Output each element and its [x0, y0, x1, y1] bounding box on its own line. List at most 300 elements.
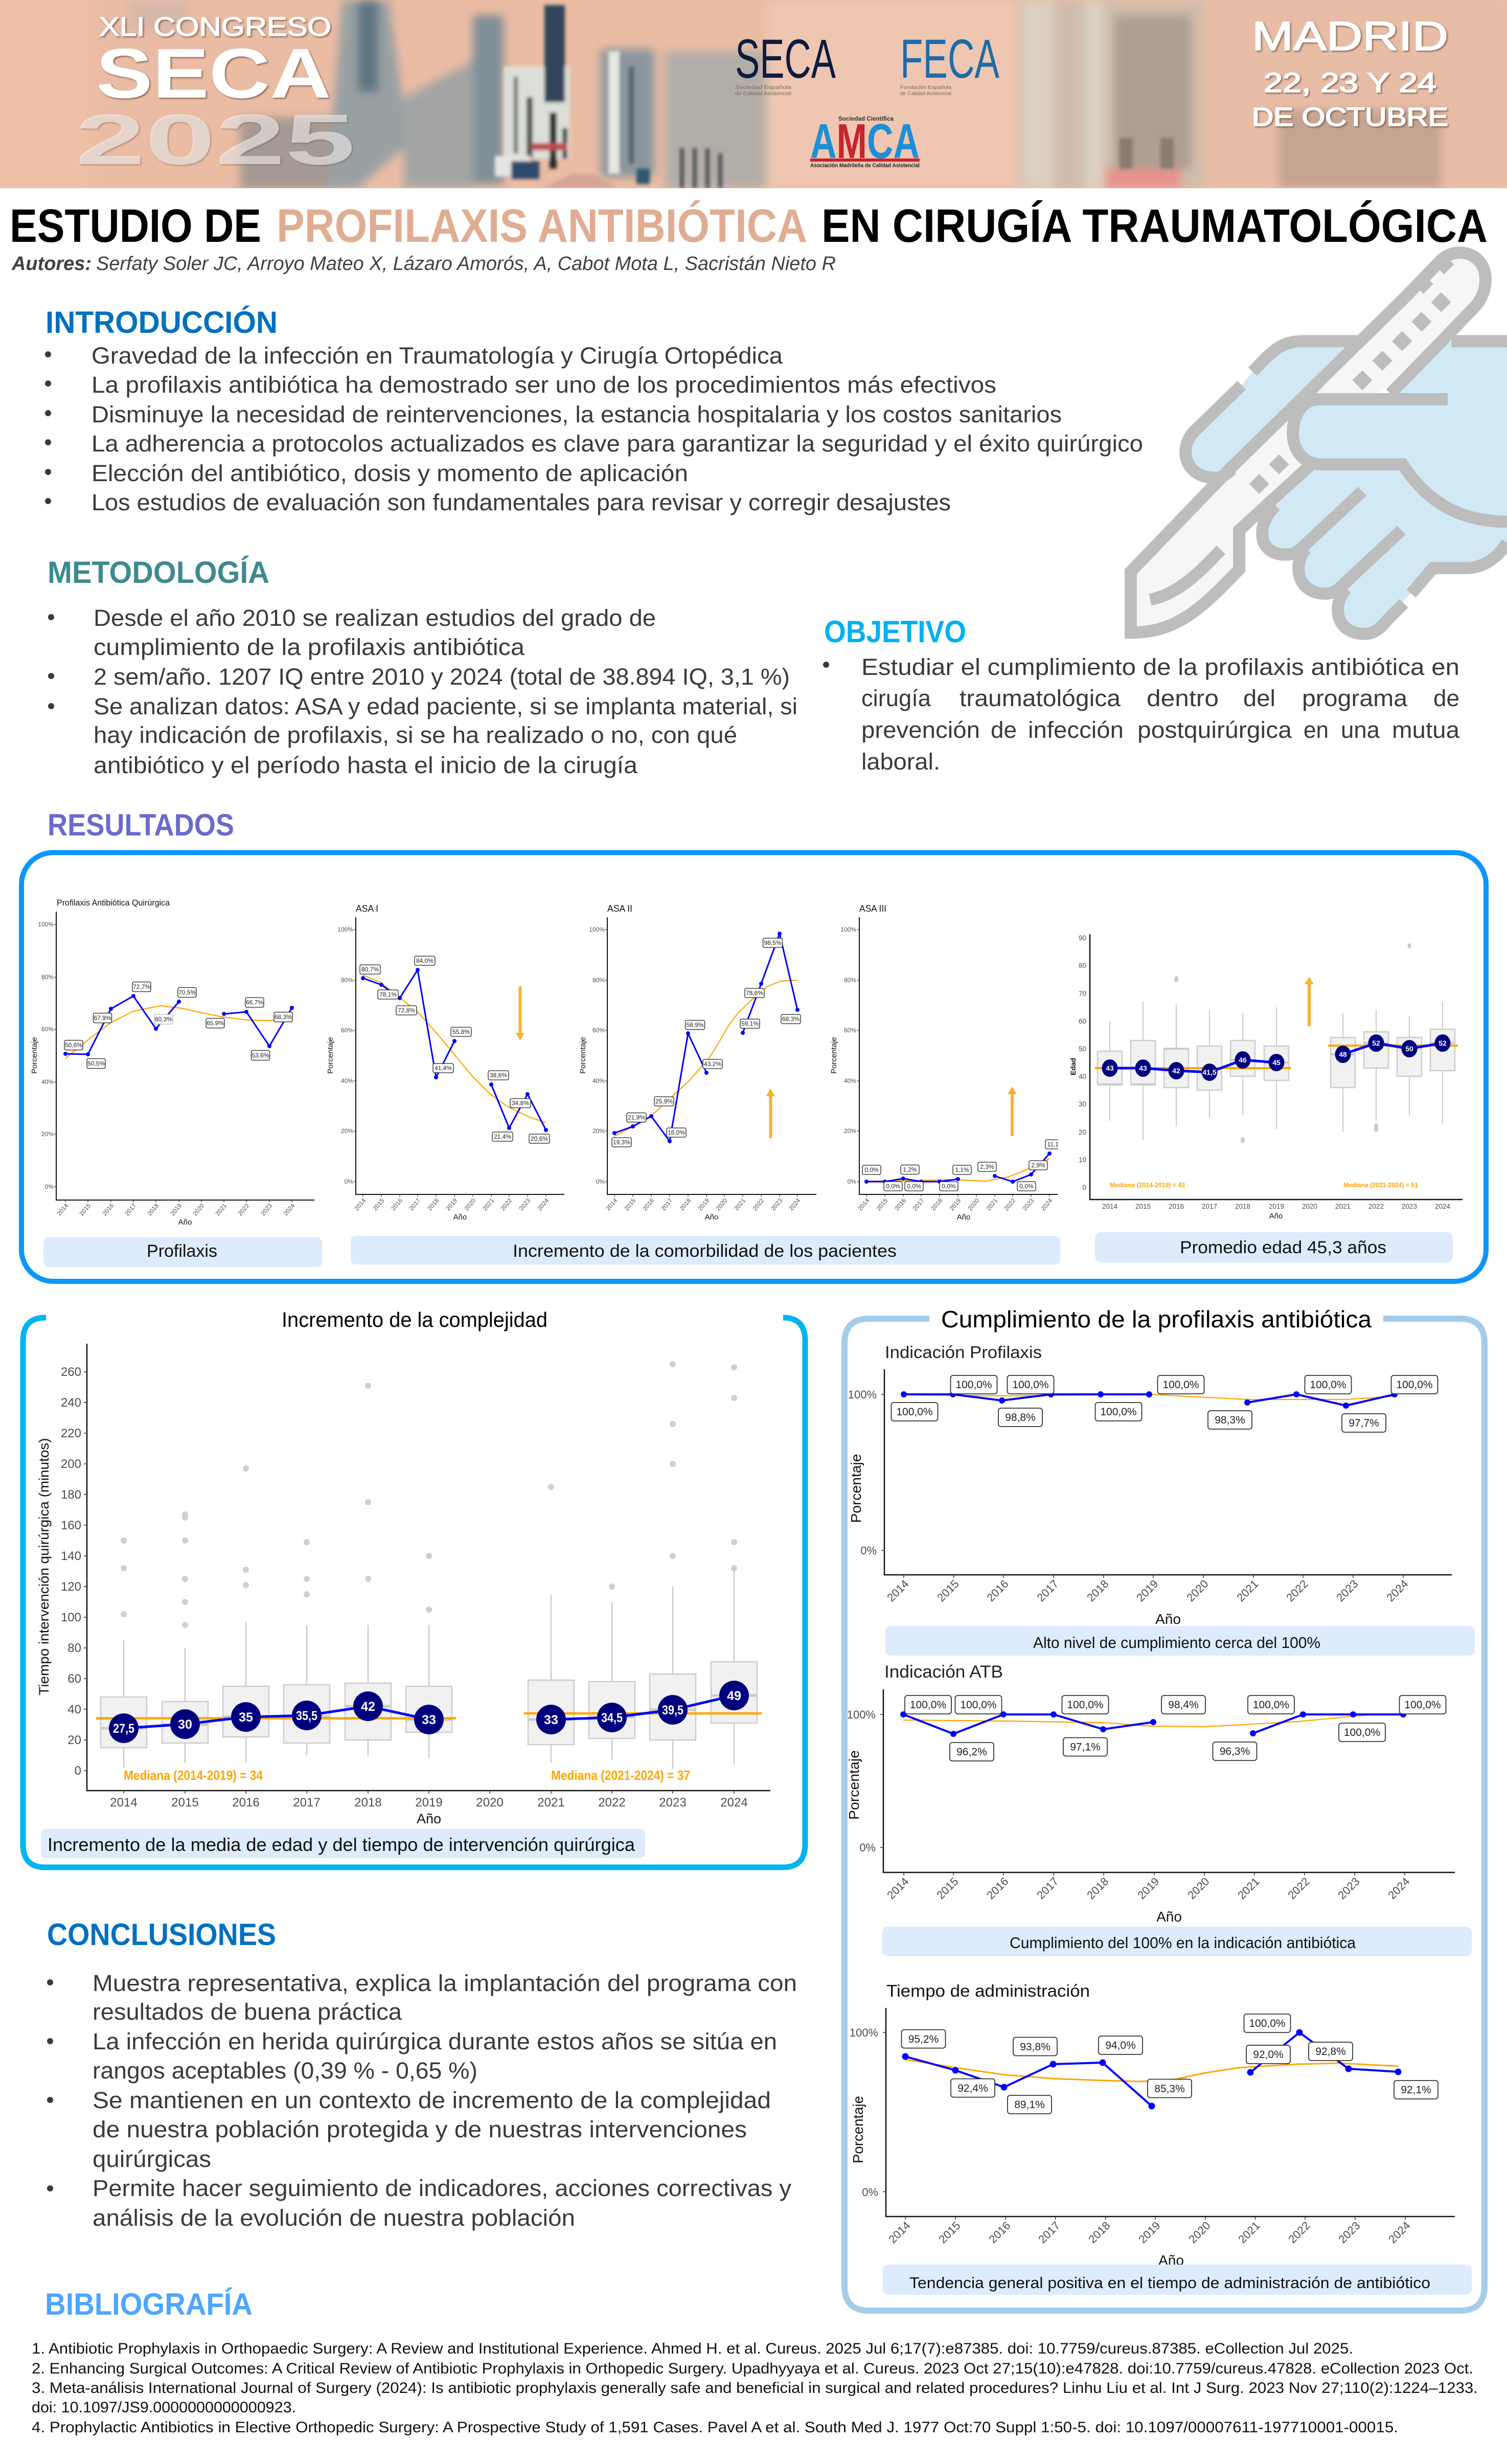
- chart: ASA II: 2022: [751, 1197, 766, 1212]
- chart: tiempo de administración: 2023: [1336, 2219, 1363, 2246]
- chart: indicación ATB: 96,2%: [956, 1746, 987, 1758]
- chart: indicación profilaxis: [848, 1343, 1452, 1627]
- chart: ASA III: 2015: [875, 1197, 889, 1212]
- chart: ASA III: 2,3%: [980, 1163, 994, 1170]
- text block: conclusions bullets: La infección en herida quirúrgica durante estos años se sitúa en: [93, 2028, 777, 2054]
- heading: bibliografía: BIBLIOGRAFÍA: [45, 2287, 253, 2321]
- chart: tiempo de administración: 2016: [986, 2219, 1013, 2246]
- chart: tiempo de administración: 89,1%: [1014, 2099, 1045, 2111]
- chart: indicación ATB: 2017: [1034, 1875, 1061, 1902]
- chart: profilaxis: 2023: [259, 1202, 274, 1217]
- chart: indicación ATB: 2014: [884, 1875, 911, 1902]
- logo: SECA: Sociedad Española: [735, 85, 792, 91]
- chart: profilaxis: 67,9%: [94, 1014, 111, 1022]
- chart: surgical time boxplot: 39,5: [662, 1703, 683, 1717]
- chart: profilaxis: Año: [178, 1218, 192, 1227]
- chart: age boxplot: 2023: [1402, 1203, 1417, 1210]
- chart: ASA II: 2020: [714, 1197, 729, 1212]
- chart: surgical time boxplot: 220: [61, 1427, 81, 1440]
- chart: ASA I: 80,7%: [361, 966, 379, 973]
- chart: surgical time boxplot: 34,5: [601, 1711, 623, 1725]
- logo: AMCA: Sociedad Científica: [838, 115, 894, 122]
- logo: FECA: [900, 39, 999, 95]
- caption: profilaxis: Profilaxis: [147, 1241, 217, 1261]
- chart: indicación ATB: 97,1%: [1070, 1742, 1101, 1753]
- chart: indicación ATB: 0%: [859, 1841, 876, 1854]
- text block: conclusions bullets: de nuestra población protegida y de nuestras intervenciones: [93, 2116, 747, 2142]
- chart: indicación ATB: [846, 1662, 1455, 1925]
- chart: ASA II: 68,3%: [782, 1015, 800, 1023]
- title: PROFILAXIS ANTIBIÓTICA: [277, 199, 807, 252]
- heading: objetivo: OBJETIVO: [824, 615, 966, 649]
- text block: methodology bullets: 2 sem/año. 1207 IQ entre 2010 y 2024 (total de 38.894 IQ, 3,1 %): [94, 664, 790, 690]
- chart: tiempo de administración: 2014: [886, 2219, 913, 2246]
- caption: comorbilidad: Incremento de la comorbilidad de los pacientes: [513, 1241, 897, 1261]
- text block: methodology bullets: antibiótico y el período hasta el inicio de la cirugía: [94, 752, 638, 778]
- chart: ASA II: Porcentaje: [579, 1037, 587, 1074]
- caption: cumplimiento del 100%: Cumplimiento del 100% en la indicación antibiótica: [1010, 1934, 1356, 1952]
- chart: age boxplot: 41,5: [1202, 1068, 1217, 1076]
- text block: conclusions bullets: análisis de la evolución de nuestra población: [93, 2205, 575, 2231]
- chart: ASA III: 0,0%: [942, 1183, 956, 1190]
- logo: SECA: SECA: [735, 28, 836, 89]
- chart: profilaxis: 2021: [214, 1202, 229, 1217]
- chart: ASA III: 0,0%: [1019, 1183, 1034, 1190]
- chart: ASA III: 80%: [844, 977, 856, 984]
- chart: ASA II: 80%: [592, 977, 605, 984]
- chart: indicación ATB: Porcentaje: [846, 1750, 862, 1820]
- chart: tiempo de administración: 93,8%: [1020, 2041, 1051, 2053]
- chart: ASA I: 72,8%: [398, 1007, 415, 1014]
- chart: indicación profilaxis: 97,7%: [1349, 1417, 1379, 1429]
- chart: tiempo de administración: Tiempo de administración: [886, 1981, 1090, 2000]
- chart: ASA III: 2016: [893, 1197, 908, 1212]
- heading: resultados: RESULTADOS: [48, 808, 234, 842]
- chart: indicación profilaxis: 2022: [1284, 1577, 1311, 1604]
- chart: profilaxis: 65,9%: [207, 1020, 224, 1027]
- chart: profilaxis: 20%: [41, 1131, 54, 1138]
- text block: methodology bullets: [48, 605, 797, 778]
- chart: tiempo de administración: 92,4%: [957, 2083, 988, 2094]
- arrow: age up: [1305, 977, 1314, 1026]
- chart: surgical time boxplot: 35,5: [296, 1709, 317, 1723]
- chart: indicación ATB: Año: [1156, 1909, 1182, 1925]
- chart: tiempo de administración: 2017: [1036, 2219, 1063, 2246]
- chart: ASA II: 2015: [623, 1197, 637, 1212]
- chart: indicación ATB: 98,4%: [1168, 1699, 1199, 1711]
- chart: profilaxis: 70,5%: [178, 989, 196, 996]
- chart: surgical time boxplot: Mediana (2021-2024) = 37: [551, 1768, 690, 1783]
- chart: ASA I: 34,8%: [512, 1099, 529, 1106]
- chart: indicación profilaxis: 2023: [1334, 1577, 1361, 1604]
- text block: objective: programa: [1302, 685, 1408, 711]
- chart: ASA I: Año: [453, 1213, 467, 1222]
- chart: surgical time boxplot: 27,5: [113, 1722, 134, 1736]
- chart: ASA I: 2018: [426, 1197, 441, 1212]
- chart: tiempo de administración: 2019: [1136, 2219, 1163, 2246]
- arrow: ASA II up: [766, 1089, 775, 1138]
- chart: ASA III: 0,0%: [864, 1166, 879, 1173]
- chart: ASA II: [579, 903, 816, 1222]
- chart: indicación profilaxis: 100,0%: [1012, 1379, 1049, 1391]
- chart: ASA III: 1,1%: [955, 1166, 969, 1173]
- text block: introduction bullets: Elección del antibiótico, dosis y momento de aplicación: [92, 460, 688, 486]
- chart: age boxplot: 52: [1438, 1039, 1447, 1047]
- chart: surgical time boxplot: 30: [178, 1717, 192, 1732]
- chart: profilaxis: 2022: [236, 1202, 251, 1217]
- chart: ASA III: ASA III: [859, 903, 886, 914]
- chart: indicación profilaxis: 100%: [848, 1388, 877, 1401]
- chart: surgical time boxplot: Tiempo intervención quirúrgica (minutos): [36, 1438, 52, 1696]
- chart: surgical time boxplot: 0: [75, 1764, 81, 1778]
- chart: profilaxis: 2016: [101, 1202, 116, 1217]
- chart: ASA I: 2014: [353, 1197, 368, 1212]
- chart: indicación ATB: 2020: [1185, 1875, 1212, 1902]
- caption: complejidad: [41, 1829, 645, 1858]
- chart: indicación ATB: 100,0%: [1404, 1699, 1441, 1711]
- chart: indicación ATB: 100,0%: [910, 1699, 946, 1711]
- text block: references: [32, 2340, 1478, 2436]
- chart: indicación ATB: 2015: [934, 1875, 961, 1902]
- text block: objective: de: [1433, 685, 1459, 711]
- text block: objective: laboral.: [861, 749, 940, 775]
- chart: indicación ATB: 100,0%: [960, 1699, 997, 1711]
- caption: cumplimiento del 100%: [882, 1927, 1472, 1956]
- text block: references: 1. Antibiotic Prophylaxis in Orthopaedic Surgery: A Review and Institutional Experience. Ahmed H. et al. Cureus. 2025 Jul 6;17(7):e87385. doi: 10.7759/cureus.87385. eCollection Jul 2025.: [32, 2340, 1353, 2357]
- chart: age boxplot: 30: [1079, 1100, 1086, 1108]
- chart: indicación ATB: 2024: [1385, 1875, 1412, 1902]
- panel: cumplimiento: [844, 1319, 1485, 2311]
- chart: profilaxis: [30, 898, 314, 1227]
- text block: objective: mutua: [1392, 717, 1460, 743]
- chart: tiempo de administración: [850, 1981, 1455, 2268]
- chart: indicación profilaxis: 2019: [1134, 1577, 1161, 1604]
- title: ESTUDIO DE: [10, 200, 261, 252]
- logo: FECA: FECA: [900, 28, 999, 89]
- chart: ASA II: 0%: [596, 1178, 605, 1185]
- text block: references: 4. Prophylactic Antibiotics in Elective Orthopedic Surgery: A Prospective Study of 1,591 Cases. Pavel A et al. South Med J. 1977 Oct:70 Suppl 1:50-5. doi: 10.1097/00007611-197710001-00015.: [32, 2419, 1398, 2436]
- chart: ASA III: 60%: [844, 1027, 856, 1034]
- heading: metodología: METODOLOGÍA: [48, 555, 269, 590]
- chart: ASA III: 2020: [966, 1197, 981, 1212]
- chart: surgical time boxplot: 33: [544, 1713, 558, 1727]
- chart: tiempo de administración: 2021: [1236, 2219, 1263, 2246]
- chart: age boxplot: 50: [1405, 1045, 1413, 1053]
- chart: tiempo de administración: 2024: [1386, 2219, 1413, 2246]
- chart: ASA III: 2023: [1021, 1197, 1036, 1212]
- chart: ASA II: 58,9%: [686, 1022, 704, 1029]
- chart: age boxplot: Año: [1269, 1212, 1283, 1220]
- chart: indicación profilaxis: 100,0%: [1310, 1379, 1346, 1391]
- congress title: SECA: [96, 34, 331, 113]
- chart: tiempo de administración: 2015: [936, 2219, 963, 2246]
- chart: ASA I: 55,8%: [452, 1028, 470, 1035]
- chart: ASA II: 60%: [592, 1027, 605, 1034]
- text block: conclusions bullets: [47, 1970, 797, 2231]
- text block: objective: en: [1304, 717, 1329, 743]
- chart: indicación profilaxis: 98,8%: [1005, 1412, 1036, 1423]
- chart: ASA III: 2019: [948, 1197, 963, 1212]
- chart: profilaxis: 68,3%: [275, 1013, 292, 1021]
- chart: age boxplot: Edad: [1069, 1058, 1077, 1075]
- chart: age boxplot: Mediana (2021-2024) = 51: [1343, 1181, 1418, 1189]
- chart: indicación ATB: 100,0%: [1067, 1699, 1104, 1711]
- congress place and date: 22, 23 Y 24: [1264, 67, 1436, 98]
- congress title: [80, 16, 354, 167]
- logo: FECA: de Calidad Asistencial: [900, 91, 951, 97]
- chart: surgical time boxplot: 2023: [659, 1796, 687, 1810]
- chart: profilaxis: 40%: [41, 1078, 54, 1086]
- chart: profilaxis: 72,7%: [133, 983, 150, 990]
- heading: incremento de la complejidad: Incremento de la complejidad: [282, 1308, 547, 1331]
- chart: tiempo de administración: 95,2%: [908, 2033, 939, 2045]
- chart: surgical time boxplot: 35: [239, 1710, 253, 1725]
- text block: objective: traumatológica: [960, 685, 1121, 711]
- chart: profilaxis: 50,6%: [65, 1042, 82, 1049]
- text block: conclusions bullets: Muestra representativa, explica la implantación del programa con: [93, 1970, 797, 1996]
- chart: ASA I: Porcentaje: [326, 1037, 335, 1074]
- chart: ASA III: 20%: [844, 1127, 856, 1135]
- chart: ASA III: Porcentaje: [830, 1037, 838, 1074]
- chart: age boxplot: 2021: [1335, 1203, 1351, 1210]
- text block: objective: infección: [1028, 717, 1124, 743]
- authors: Serfaty Soler JC, Arroyo Mateo X, Lázaro Amorós, A, Cabot Mota L, Sacristán Nieto R: [96, 253, 836, 275]
- chart: profilaxis: 2015: [78, 1202, 93, 1217]
- chart: tiempo de administración: 94,0%: [1105, 2040, 1136, 2051]
- chart: age boxplot: 60: [1079, 1018, 1086, 1025]
- chart: profilaxis: 100%: [38, 921, 54, 928]
- chart: ASA II: 40%: [592, 1077, 605, 1084]
- chart: ASA II: 98,5%: [764, 939, 782, 946]
- chart: age boxplot: 80: [1079, 962, 1086, 969]
- chart: ASA III: [830, 903, 1066, 1222]
- text block: conclusions bullets: rangos aceptables (0,39 % - 0,65 %): [93, 2058, 477, 2084]
- chart: ASA I: 2016: [390, 1197, 404, 1212]
- text block: introduction bullets: [45, 343, 1143, 515]
- chart: profilaxis: 2019: [169, 1202, 184, 1217]
- chart: indicación ATB: 2023: [1335, 1875, 1362, 1902]
- chart: profilaxis: 2018: [146, 1202, 161, 1217]
- congress title: 2025: [75, 99, 355, 179]
- logo: SECA: de Calidad Asistencial: [735, 91, 791, 97]
- chart: surgical time boxplot: 100: [61, 1611, 81, 1624]
- chart: surgical time boxplot: 2024: [720, 1796, 748, 1810]
- caption: alto nivel: Alto nivel de cumplimiento cerca del 100%: [1033, 1634, 1320, 1652]
- caption: tendencia: [882, 2265, 1472, 2295]
- chart: age boxplot: 2019: [1269, 1203, 1284, 1210]
- chart: tiempo de administración: 2018: [1086, 2219, 1113, 2246]
- chart: ASA II: 100%: [589, 926, 605, 933]
- text block: methodology bullets: cumplimiento de la profilaxis antibiótica: [94, 634, 525, 660]
- chart: ASA II: 2021: [733, 1197, 747, 1212]
- congress place and date: [1252, 13, 1448, 131]
- chart: indicación ATB: 2019: [1135, 1875, 1162, 1902]
- chart: age boxplot: 43: [1106, 1064, 1114, 1072]
- chart: indicación ATB: 100%: [847, 1708, 876, 1721]
- chart: ASA I: 84,0%: [416, 957, 433, 964]
- chart: ASA II: 78,6%: [746, 989, 763, 997]
- chart: ASA I: 38,6%: [490, 1072, 507, 1079]
- chart: ASA II: 2018: [678, 1197, 693, 1212]
- heading: introducción: INTRODUCCIÓN: [45, 305, 278, 340]
- text block: objective: dentro: [1147, 685, 1219, 711]
- chart: indicación profilaxis: 100,0%: [1100, 1406, 1137, 1418]
- chart: profilaxis: Porcentaje: [30, 1037, 39, 1074]
- chart: ASA III: 0,0%: [886, 1183, 900, 1190]
- chart: tiempo de administración: Porcentaje: [850, 2096, 866, 2163]
- chart: ASA II: 2014: [604, 1197, 619, 1212]
- chart: surgical time boxplot: 120: [61, 1580, 81, 1594]
- chart: tiempo de administración: Año: [1158, 2252, 1184, 2268]
- chart: surgical time boxplot: Mediana (2014-2019) = 34: [124, 1768, 263, 1783]
- chart: tiempo de administración: 85,3%: [1154, 2083, 1185, 2095]
- chart: indicación profilaxis: Año: [1155, 1611, 1181, 1627]
- chart: profilaxis: 50,5%: [87, 1060, 105, 1067]
- icon: gloved hand holding scalpel: [1131, 253, 1507, 634]
- chart: age boxplot: 46: [1239, 1056, 1247, 1064]
- chart: ASA III: 2024: [1039, 1197, 1054, 1212]
- chart: age boxplot: 40: [1079, 1073, 1086, 1080]
- chart: ASA I: 2021: [481, 1197, 496, 1212]
- text block: references: 3. Meta-análisis International Journal of Surgery (2024): Is antibiotic prophylaxis generally safe and beneficial in surgical and related procedures? Linhu Liu et al. Int J Surg. 2023 Nov 27;110(2):1224–1233.: [32, 2380, 1478, 2397]
- chart: age boxplot: 20: [1079, 1128, 1086, 1136]
- chart: age boxplot: 43: [1139, 1064, 1147, 1072]
- chart: tiempo de administración: 0%: [862, 2186, 878, 2199]
- chart: ASA II: Año: [705, 1213, 718, 1222]
- chart: indicación profilaxis: 100,0%: [955, 1379, 992, 1391]
- chart: indicación ATB: 96,3%: [1220, 1746, 1250, 1757]
- chart: age boxplot: 10: [1079, 1156, 1086, 1164]
- text block: introduction bullets: La profilaxis antibiótica ha demostrado ser uno de los procedimientos más efectivos: [92, 372, 996, 398]
- chart: age boxplot: 2017: [1202, 1203, 1217, 1210]
- chart: tiempo de administración: 92,1%: [1401, 2084, 1431, 2096]
- chart: ASA I: 2022: [499, 1197, 514, 1212]
- chart: surgical time boxplot: 40: [67, 1703, 81, 1716]
- chart: surgical time boxplot: 2017: [293, 1796, 321, 1810]
- chart: ASA I: 2023: [517, 1197, 532, 1212]
- chart: surgical time boxplot: 2019: [415, 1796, 443, 1810]
- text block: conclusions bullets: resultados de buena práctica: [93, 1999, 402, 2025]
- congress title: XLI CONGRESO: [99, 12, 331, 42]
- chart: tiempo de administración: 100%: [850, 2026, 878, 2039]
- caption: profilaxis: [43, 1237, 322, 1267]
- chart: profilaxis: 60,3%: [155, 1015, 172, 1023]
- text block: methodology bullets: Se analizan datos: ASA y edad paciente, si se implanta material, si: [94, 693, 797, 719]
- text block: methodology bullets: Desde el año 2010 se realizan estudios del grado de: [94, 605, 656, 631]
- chart: surgical time boxplot: 180: [61, 1488, 81, 1502]
- chart: surgical time boxplot: 49: [727, 1689, 741, 1703]
- chart: ASA III: 0%: [848, 1178, 856, 1185]
- caption: complejidad: Incremento de la media de edad y del tiempo de intervención quirúrgica: [48, 1834, 635, 1855]
- chart: indicación profilaxis: 2017: [1034, 1577, 1061, 1604]
- chart: ASA II: 43,2%: [704, 1060, 721, 1068]
- chart: surgical time boxplot: Año: [417, 1811, 441, 1826]
- chart: ASA II: ASA II: [607, 903, 632, 914]
- text block: introduction bullets: La adherencia a protocolos actualizados es clave para garantizar la seguridad y el éxito quirúrgico: [92, 431, 1143, 457]
- chart: ASA I: 2015: [371, 1197, 386, 1212]
- chart: ASA I: 80%: [341, 977, 353, 984]
- heading: cumplimiento: Cumplimiento de la profilaxis antibiótica: [941, 1306, 1372, 1332]
- text block: references: 2. Enhancing Surgical Outcomes: A Critical Review of Antibiotic Prophylaxis in Orthopedic Surgery. Upadhyyaya et al. Cureus. 2023 Oct 27;15(10):e47828. doi:10.7759/cureus.47828. eCollection 2023 Oct.: [32, 2360, 1473, 2377]
- caption: tendencia: Tendencia general positiva en el tiempo de administración de antibiótico: [909, 2274, 1430, 2292]
- chart: ASA III: 2018: [929, 1197, 944, 1212]
- chart: ASA III: 2,9%: [1031, 1162, 1045, 1169]
- chart: indicación profilaxis: 2020: [1184, 1577, 1211, 1604]
- chart: indicación profilaxis: 0%: [860, 1544, 877, 1557]
- chart: ASA III: 2022: [1002, 1197, 1017, 1212]
- chart: age boxplot: 2020: [1302, 1203, 1317, 1210]
- chart: tiempo de administración: 100,0%: [1249, 2018, 1286, 2029]
- caption: alto nivel: [885, 1626, 1475, 1656]
- text block: conclusions bullets: Se mantienen en un contexto de incremento de la complejidad: [93, 2087, 771, 2113]
- chart: surgical time boxplot: 260: [61, 1365, 81, 1379]
- chart: age boxplot: 2022: [1368, 1203, 1384, 1210]
- chart: ASA II: 2019: [696, 1197, 711, 1212]
- chart: indicación profilaxis: 100,0%: [1396, 1379, 1433, 1391]
- text block: objective: Estudiar el cumplimiento de la profilaxis antibiótica en: [861, 654, 1459, 680]
- chart: surgical time boxplot: 140: [61, 1549, 81, 1563]
- chart: ASA II: 20%: [592, 1127, 605, 1135]
- chart: age boxplot: 70: [1079, 990, 1086, 998]
- chart: surgical time boxplot: 2016: [232, 1796, 260, 1810]
- chart: age boxplot: 50: [1079, 1045, 1086, 1053]
- chart: tiempo de administración: 92,8%: [1315, 2046, 1346, 2058]
- chart: profilaxis: 0%: [45, 1183, 54, 1190]
- chart: ASA III: 11,1%: [1047, 1141, 1064, 1148]
- chart: ASA I: 41,4%: [435, 1065, 452, 1072]
- chart: ASA II: 59,1%: [741, 1020, 759, 1027]
- chart: age boxplot: 0: [1082, 1184, 1086, 1191]
- chart: indicación ATB: 100,0%: [1253, 1699, 1289, 1711]
- chart: ASA I: 20,6%: [531, 1135, 548, 1142]
- logo: AMCA: AMCA: [810, 114, 920, 169]
- chart: profilaxis: 66,7%: [246, 999, 263, 1006]
- logo: FECA: Fundación Española: [900, 85, 951, 91]
- chart: ASA III: Año: [957, 1213, 970, 1222]
- chart: ASA I: 2020: [463, 1197, 477, 1212]
- chart: age boxplot: 2014: [1102, 1203, 1118, 1210]
- chart: indicación profilaxis: 2024: [1384, 1577, 1411, 1604]
- text block: objective: prevención: [861, 717, 980, 743]
- chart: tiempo de administración: 2022: [1286, 2219, 1313, 2246]
- chart: ASA I: 60%: [341, 1027, 353, 1034]
- chart: profilaxis: 2020: [191, 1202, 206, 1217]
- arrow: ASA III up: [1008, 1087, 1017, 1136]
- text block: methodology bullets: hay indicación de profilaxis, si se ha realizado o no, con qué: [94, 722, 737, 748]
- chart: ASA III: 100%: [840, 926, 856, 933]
- chart: age boxplot: 52: [1372, 1039, 1380, 1047]
- text block: conclusions bullets: quirúrgicas: [93, 2146, 211, 2172]
- chart: surgical time boxplot: 60: [67, 1672, 81, 1686]
- chart: indicación ATB: 2016: [984, 1875, 1011, 1902]
- chart: surgical time boxplot: [36, 1344, 770, 1826]
- text block: introduction bullets: Disminuye la necesidad de reintervenciones, la estancia hospitalaria y los costos sanitarios: [92, 401, 1062, 427]
- chart: ASA II: 2024: [787, 1197, 802, 1212]
- chart: age boxplot: 2016: [1169, 1203, 1184, 1210]
- chart: ASA II: 19,3%: [613, 1139, 630, 1146]
- chart: surgical time boxplot: 2022: [598, 1796, 626, 1810]
- text block: objective: [823, 654, 1460, 775]
- chart: surgical time boxplot: 20: [67, 1733, 81, 1747]
- text block: objective: cirugía: [861, 685, 931, 711]
- chart: age boxplot: 42: [1172, 1067, 1180, 1075]
- text block: introduction bullets: Los estudios de evaluación son fundamentales para revisar y corregir desajustes: [92, 489, 951, 515]
- chart: indicación profilaxis: Indicación Profilaxis: [885, 1343, 1042, 1362]
- caption: edad: Promedio edad 45,3 años: [1180, 1238, 1386, 1257]
- chart: profilaxis: 2024: [282, 1202, 296, 1217]
- chart: ASA I: 0%: [345, 1178, 353, 1185]
- chart: ASA I: ASA I: [356, 903, 378, 914]
